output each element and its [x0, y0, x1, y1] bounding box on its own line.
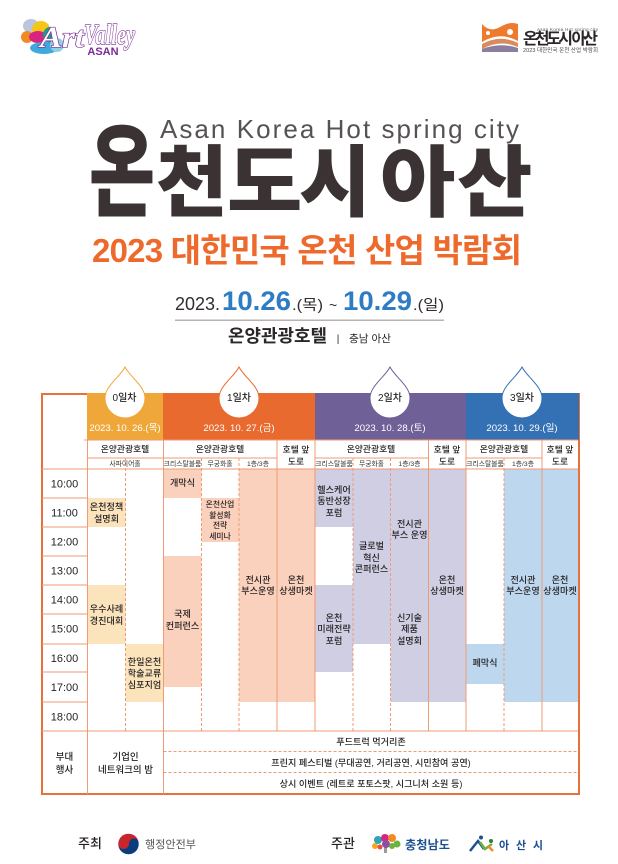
- side events: 푸드트럭 먹거리존: [336, 736, 406, 747]
- logo: Art Valley Asan: ASAN: [87, 46, 119, 58]
- venue headers: 1층/3층: [399, 459, 420, 468]
- venue headers: 도로: [439, 456, 455, 466]
- title: 온천도시 아산: 천: [156, 139, 228, 227]
- event labels: 제품: [401, 624, 418, 634]
- footer: organizers: 아산시: [499, 838, 543, 852]
- venue headers: 무궁화홀: [359, 459, 384, 468]
- event labels: 포럼: [326, 507, 342, 518]
- venue headers: 사파이어홀: [109, 459, 141, 468]
- venue: 충남 아산: [349, 333, 391, 345]
- venue: 온양관광호텔: [228, 326, 327, 346]
- venue headers: 호텔 앞: [547, 444, 573, 454]
- event labels: 온천산업: [206, 499, 234, 509]
- drop: day 0: 0일차: [113, 391, 136, 404]
- event labels: 심포지엄: [128, 679, 161, 690]
- logo: Art Valley Asan: [21, 19, 135, 58]
- subtitle: Asan Korea Hot spring city: Asan Korea Hot spring city: [160, 114, 519, 144]
- date labels: [89, 423, 558, 434]
- event labels: 부스 운영: [392, 530, 428, 540]
- event labels: 세미나: [209, 531, 231, 541]
- logo: Hot spring city Asan: 2023 대한민국 온천 산업 박람회: [523, 46, 598, 54]
- event labels: 온천정책: [90, 501, 123, 512]
- drop: day 2: [370, 367, 410, 418]
- logo: Art Valley Asan: Valley: [84, 19, 135, 51]
- dates: [175, 286, 444, 321]
- event labels: [90, 477, 577, 690]
- side events: [56, 736, 471, 789]
- venue headers: 1층/3층: [247, 459, 269, 468]
- icon: taegeuk: [118, 834, 139, 854]
- event labels: 학술교류: [128, 668, 161, 678]
- time labels: 10:00: [51, 478, 78, 490]
- event labels: 전시관: [510, 574, 536, 585]
- icon: Asan city: [470, 836, 493, 851]
- event labels: 상생마켓: [279, 585, 313, 596]
- drop: day 3: [502, 367, 542, 418]
- schedule table: [42, 367, 579, 794]
- event labels: 부스운영: [506, 586, 540, 596]
- event labels: 온천: [326, 613, 342, 623]
- drop: day 1: [219, 367, 259, 418]
- venue headers: 온양관광호텔: [196, 443, 244, 454]
- title: 온천도시 아산: 온: [89, 116, 155, 230]
- footer: host: 주최: [78, 836, 102, 851]
- side events: 부대: [56, 751, 73, 763]
- side events: 기업인: [112, 751, 139, 763]
- header band: day 0: [87, 393, 163, 440]
- dates: 10.26: [222, 286, 291, 316]
- time labels: [51, 478, 78, 724]
- dates: ~: [329, 297, 337, 313]
- grid lines: [42, 440, 578, 794]
- venue headers: 도로: [552, 456, 568, 466]
- time labels: 17:00: [51, 682, 78, 694]
- venue headers: 크리스탈볼룸: [164, 459, 201, 468]
- event labels: 헬스케어: [317, 484, 351, 495]
- dates: .(목): [292, 298, 323, 314]
- time labels: 15:00: [51, 624, 78, 636]
- event labels: 설명회: [94, 513, 119, 524]
- time labels: 16:00: [51, 653, 78, 665]
- event labels: 글로벌: [359, 540, 384, 551]
- venue headers: 온양관광호텔: [480, 443, 528, 454]
- venue headers: 호텔 앞: [283, 444, 309, 454]
- logo: Art Valley Asan: Art: [38, 21, 86, 54]
- event labels: 전시관: [397, 518, 423, 529]
- drop: day 2: 2일차: [378, 391, 402, 404]
- footer: host: [78, 834, 196, 854]
- logo: Hot spring city Asan: Asan Korea Hot spring city: [537, 27, 599, 32]
- drop: day 1: 1일차: [227, 391, 251, 404]
- event name: 2023 대한민국 온천 산업 박람회: [92, 232, 522, 269]
- footer: host: 행정안전부: [145, 838, 196, 851]
- title: 온천도시 아산: 도: [227, 140, 302, 227]
- footer: organizers: 주관: [331, 836, 355, 851]
- date labels: 2023. 10. 29.(일): [486, 423, 558, 434]
- event labels: 우수사례: [90, 604, 123, 614]
- event labels: 국제: [174, 609, 191, 619]
- event labels: 폐막식: [472, 657, 498, 668]
- time labels: 12:00: [51, 536, 78, 548]
- event labels: 활성화: [209, 510, 231, 520]
- logo: Hot spring city Asan: [482, 23, 599, 54]
- time labels: 13:00: [51, 566, 78, 578]
- venue: |: [337, 334, 339, 345]
- venue headers: 도로: [288, 456, 304, 466]
- event labels: 미래전략: [317, 623, 351, 634]
- venue headers: 크리스탈볼룸: [466, 459, 504, 468]
- time labels: 18:00: [51, 712, 78, 724]
- footer: organizers: 충청남도: [405, 837, 450, 852]
- venue headers: 온양관광호텔: [101, 443, 149, 454]
- dates: .(일): [413, 297, 444, 314]
- venue headers: 호텔 앞: [434, 444, 460, 454]
- header band: day 2: [315, 393, 466, 440]
- event labels: 전략: [213, 520, 227, 530]
- event labels: 부스운영: [241, 586, 275, 596]
- event labels: 포럼: [326, 635, 342, 646]
- event labels: 경진대회: [90, 615, 123, 626]
- event labels: 컨퍼런스: [166, 621, 199, 631]
- title: 온천도시 아산: 아: [380, 140, 455, 227]
- title: 온천도시 아산: 산: [457, 140, 532, 227]
- dates: 2023.: [175, 294, 220, 314]
- event labels: 한일온천: [128, 656, 161, 667]
- drop: day 3: 3일차: [510, 391, 534, 404]
- event cells: [88, 469, 578, 702]
- event labels: 전시관: [245, 574, 271, 585]
- side events: 네트워크의 밤: [98, 764, 153, 776]
- footer: organizers: [331, 834, 543, 853]
- event labels: 설명회: [397, 635, 422, 646]
- event labels: 신기술: [397, 613, 422, 623]
- event labels: 동반성장: [317, 495, 351, 506]
- icon: Chungnam tree: [372, 834, 400, 853]
- venue headers: 크리스탈볼룸: [315, 459, 353, 468]
- side events: 행사: [56, 764, 73, 776]
- venue headers: 온양관광호텔: [347, 443, 395, 454]
- drop: day 0: [105, 367, 145, 418]
- title: 온천도시 아산: 시: [299, 139, 371, 227]
- venue headers: [101, 443, 573, 468]
- side events: 상시 이벤트 (레트로 포토스팟, 시그니처 소원 등): [280, 778, 462, 789]
- date labels: 2023. 10. 28.(토): [354, 423, 426, 434]
- title: 온천도시 아산: [89, 116, 532, 230]
- time labels: 14:00: [51, 594, 78, 606]
- date labels: 2023. 10. 27.(금): [203, 423, 275, 434]
- venue: [228, 326, 391, 346]
- event labels: 온천: [439, 575, 455, 585]
- time labels: 11:00: [51, 508, 78, 520]
- side events: 프린지 페스티벌 (무대공연, 거리공연, 시민참여 공연): [271, 757, 471, 768]
- header band: day 3: [466, 393, 579, 440]
- event labels: 콘퍼런스: [355, 564, 388, 574]
- event labels: 온천: [552, 575, 568, 585]
- event labels: 개막식: [170, 477, 195, 488]
- table frame: [42, 394, 579, 794]
- event labels: 상생마켓: [543, 585, 577, 596]
- header band: day 1: [163, 393, 315, 440]
- venue headers: 1층/3층: [512, 459, 534, 468]
- venue headers: 무궁화홀: [207, 459, 233, 468]
- event labels: 상생마켓: [430, 585, 464, 596]
- date labels: 2023. 10. 26.(목): [89, 423, 161, 434]
- logo: Hot spring city Asan: 온천도시 아산: [523, 30, 598, 48]
- dates: 10.29: [343, 286, 412, 316]
- event labels: 혁신: [363, 552, 380, 563]
- event labels: 온천: [288, 575, 304, 585]
